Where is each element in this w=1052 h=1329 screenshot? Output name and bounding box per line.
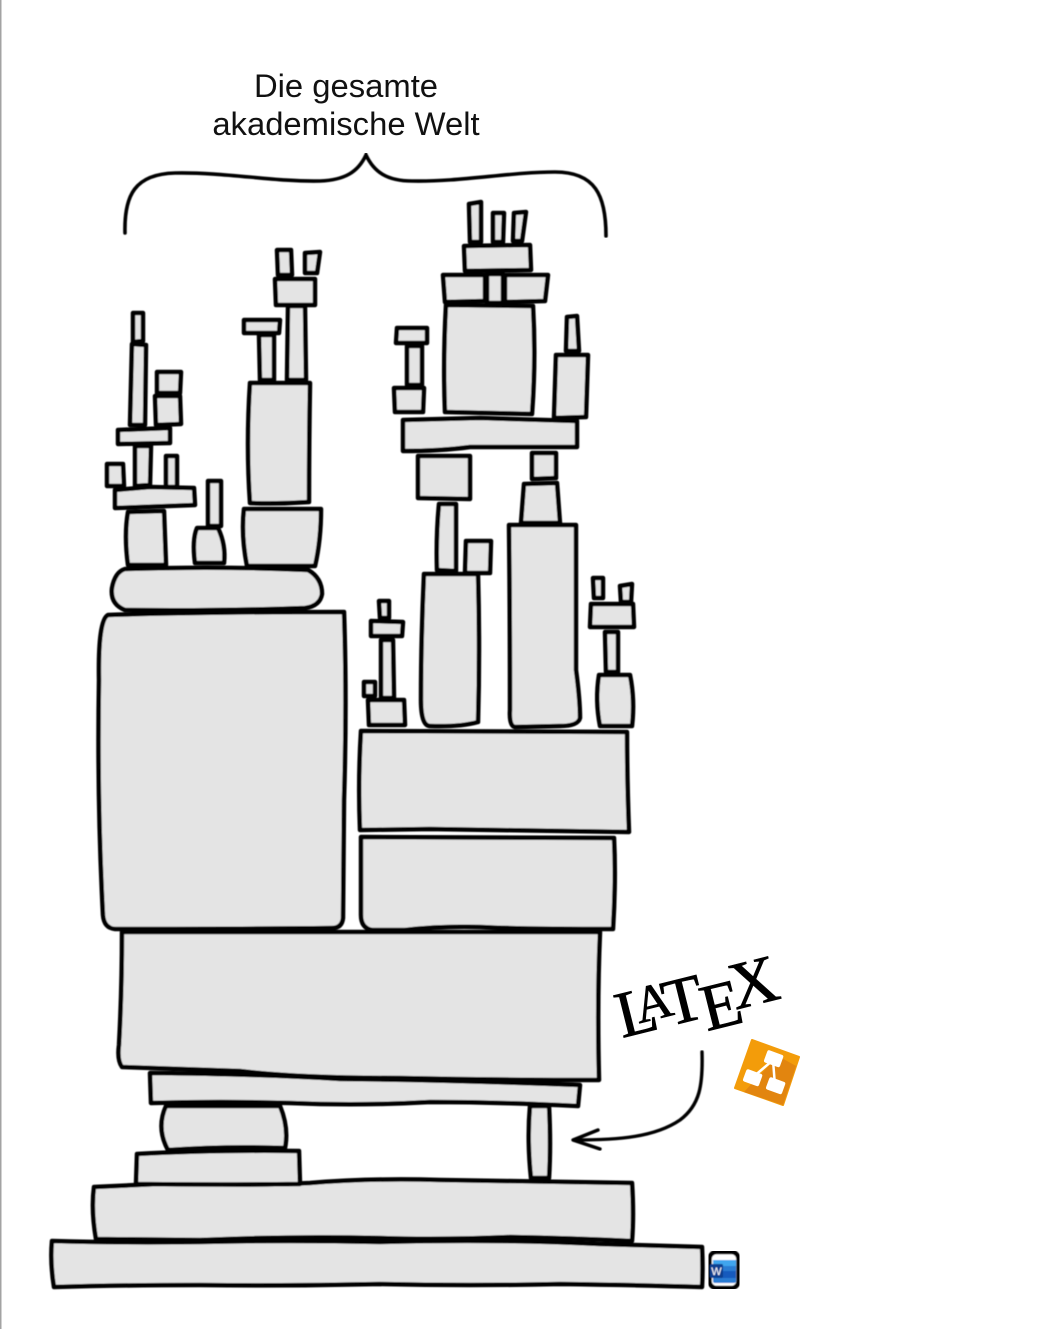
block: wide plate <box>403 418 577 451</box>
LaTeX logo: A <box>628 971 679 1035</box>
block: narrow column <box>437 504 456 571</box>
block: tall <box>248 383 310 503</box>
block: tiny square <box>107 464 124 486</box>
block: right crown tick 1 <box>469 202 481 242</box>
title: Die gesamte <box>254 67 438 104</box>
block: small tower base <box>368 700 405 725</box>
icon: Word: W <box>711 1266 722 1278</box>
block: left tall column <box>130 344 146 425</box>
block: right box <box>554 355 588 418</box>
block: fork tick right <box>620 584 632 602</box>
LaTeX logo: L <box>608 972 665 1053</box>
block: small connector <box>532 453 556 479</box>
block: side square <box>465 541 491 573</box>
block: short column <box>259 335 274 380</box>
block: dumbbell column <box>407 346 422 385</box>
block: short tower <box>126 511 166 565</box>
block: dumbbell base <box>394 388 424 412</box>
block: crown <box>275 279 315 305</box>
block: fork plate <box>590 604 634 627</box>
block: LaTeX pillar <box>529 1106 550 1178</box>
title <box>212 67 480 142</box>
block: small tower tip <box>379 601 389 618</box>
block: tall B <box>509 525 580 727</box>
block: crown plate <box>464 245 531 271</box>
block: shoulder left <box>443 275 485 302</box>
block: large left <box>98 612 346 929</box>
block: T-plate <box>244 320 280 333</box>
block: tick <box>166 456 177 487</box>
icon: Word <box>710 1252 738 1288</box>
LaTeX logo: T <box>655 960 711 1041</box>
block: lower right <box>361 837 615 930</box>
block: small tower plate <box>371 621 403 636</box>
block: right tick <box>566 316 579 351</box>
block: crown right <box>305 252 320 273</box>
icon: draw.io <box>735 1040 799 1105</box>
block: left upper plate <box>118 428 170 444</box>
block: left tower tip <box>133 313 143 342</box>
block: narrow tick <box>208 481 221 526</box>
block: plate <box>150 1073 580 1106</box>
block: small tower column <box>381 640 394 698</box>
arrow to LaTeX pillar <box>573 1052 702 1149</box>
block: small square top <box>157 372 181 393</box>
block: square under plate <box>418 456 470 499</box>
block: right crown tick 3 <box>513 212 526 241</box>
block: dumbbell top <box>396 328 427 343</box>
block: large wide <box>118 932 600 1080</box>
block: rounded small <box>194 528 224 563</box>
block: tall A <box>421 574 479 726</box>
block: small base <box>136 1151 300 1184</box>
block: small square <box>155 396 181 425</box>
block: base slab (Word) <box>51 1241 703 1287</box>
block: second slab <box>93 1179 633 1241</box>
stacked block tower <box>51 202 703 1287</box>
title: akademische Welt <box>212 105 480 142</box>
block: fork column <box>605 632 618 672</box>
block: upper right <box>359 731 629 832</box>
block: trapezoid cap <box>521 483 560 523</box>
block: shoulder right <box>505 275 548 302</box>
LaTeX logo <box>608 941 789 1066</box>
block: rounded stone <box>161 1106 286 1150</box>
block: tall column <box>287 306 306 380</box>
block: right crown tick 2 <box>493 213 504 242</box>
block: fork base <box>597 675 633 726</box>
block: tiny square <box>364 682 375 696</box>
block: top big square <box>444 305 534 414</box>
LaTeX logo: E <box>693 965 750 1046</box>
LaTeX logo: X <box>721 941 786 1024</box>
block: short column <box>135 446 151 486</box>
block: shoulder centre <box>487 274 503 303</box>
block: crown left <box>277 250 292 275</box>
block: fork tick left <box>593 578 603 598</box>
block: lower plate <box>115 487 195 508</box>
block: trapezoid <box>243 509 321 566</box>
curly brace <box>125 155 606 236</box>
block: rounded slab <box>112 568 322 610</box>
